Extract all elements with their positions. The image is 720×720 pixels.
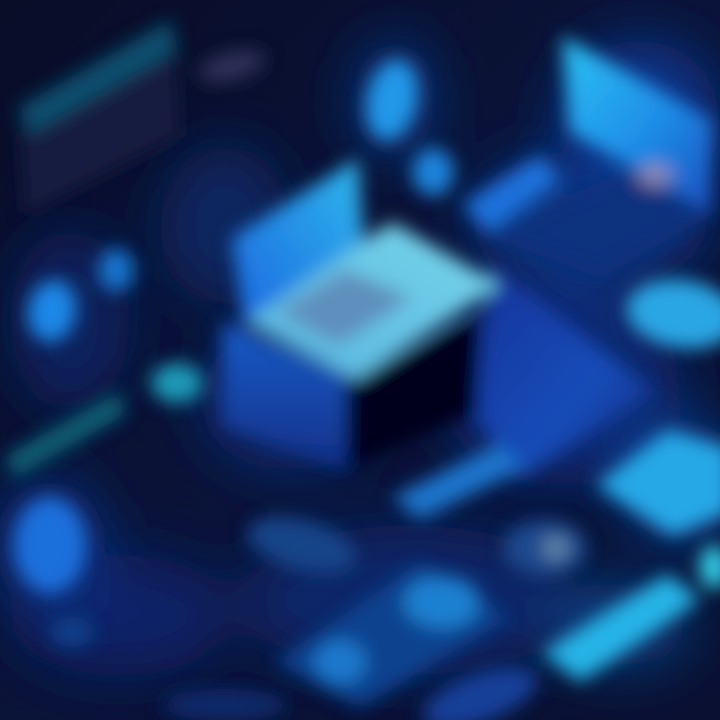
tile: centre dark blue	[241, 506, 363, 584]
dot: grey centre	[543, 535, 569, 561]
tile: lower-right grey-blue	[503, 520, 587, 576]
glow: bottom centre upper	[404, 576, 480, 628]
tile: far-right small cyan	[699, 545, 720, 589]
cube: dark right face	[346, 318, 478, 470]
blob: small cyan dot	[412, 148, 454, 196]
bar: left teal	[6, 392, 126, 478]
cube: front-left face	[222, 322, 346, 470]
glow: bottom centre lower	[314, 640, 366, 684]
tile: bottom dim	[163, 689, 287, 720]
cube: light lid	[246, 222, 500, 380]
blob: left bright blue	[23, 276, 81, 346]
blob: bottom-left blue	[14, 497, 86, 593]
panel: large blue floor	[476, 262, 655, 478]
blob: left small blue	[98, 248, 134, 292]
tile: bottom edge blue	[415, 655, 545, 720]
cube: raised screen	[232, 158, 364, 328]
panel: back right dark base	[480, 172, 715, 278]
panel: bottom centre blue	[275, 562, 510, 708]
cube: lid inner panel	[278, 270, 412, 345]
panel: top-left dark card	[20, 50, 180, 215]
blob: top grey	[196, 44, 268, 88]
screen: top-right bright	[562, 36, 712, 212]
accent: pink glow on screen	[637, 163, 673, 187]
blob: bottom-left faint	[50, 617, 94, 647]
tile: bottom-right bright capsule	[542, 574, 700, 682]
tile: right cyan	[622, 273, 720, 355]
blob: top cyan capsule	[359, 55, 425, 145]
tile: centre slanted cyan	[392, 444, 524, 520]
blob: left teal dot	[151, 363, 203, 403]
bar: top-left teal	[18, 20, 178, 135]
blob: blue slanted tile	[462, 155, 562, 232]
tile: right large cyan	[596, 430, 720, 536]
